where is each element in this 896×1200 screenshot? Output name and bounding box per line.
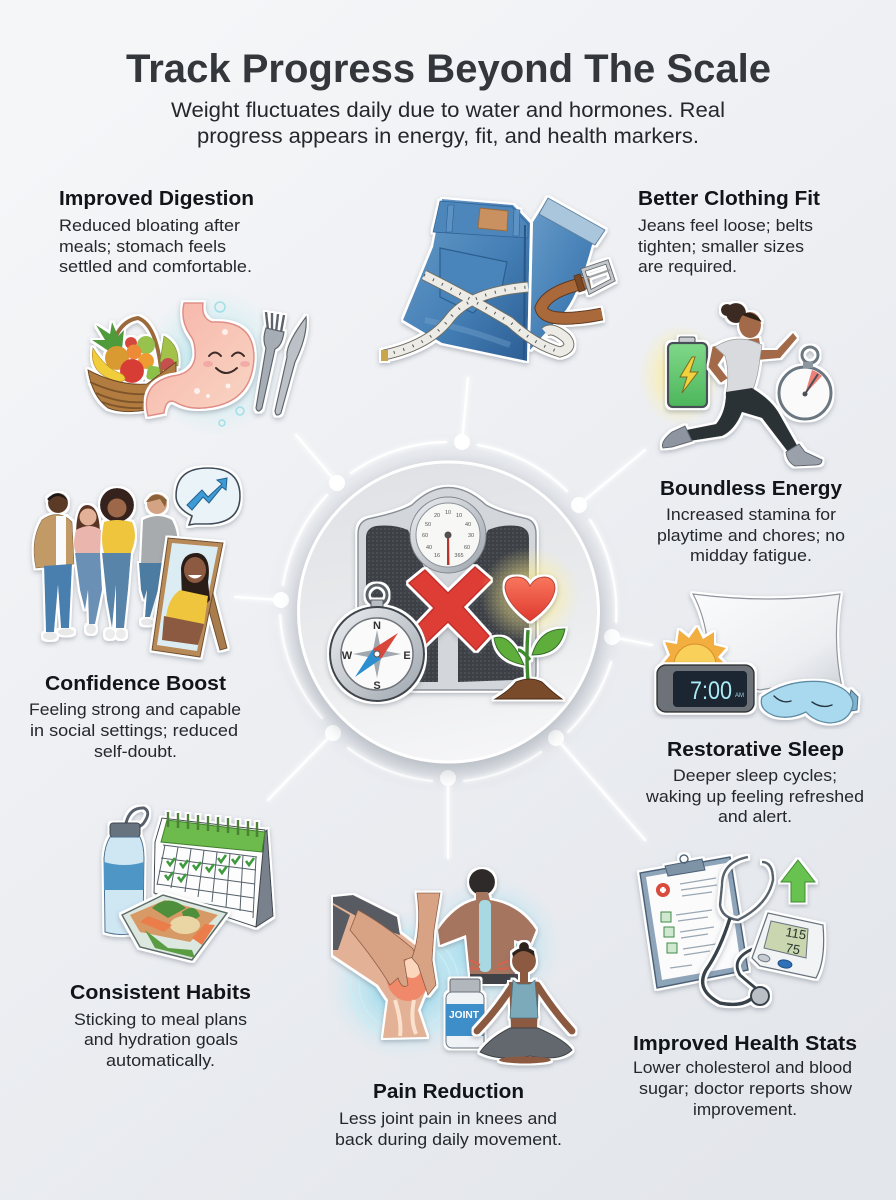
title: Track Progress Beyond The Scale <box>126 47 771 91</box>
text: consistent habits: Consistent Habits <box>70 981 251 1004</box>
text: restorative sleep: Restorative Sleep <box>667 738 844 761</box>
text: improved health stats: Improved Health Stats <box>633 1032 857 1055</box>
icon: back with glowing spine <box>438 869 536 984</box>
scale dial: 40 <box>465 522 471 528</box>
central disc <box>298 462 598 762</box>
scale dial: 50 <box>425 522 431 528</box>
panel: boundless energy <box>638 303 845 565</box>
icon: runner <box>662 303 822 466</box>
friend 4 <box>139 494 177 626</box>
scale dial: 16 <box>434 553 440 559</box>
icon: compass: W <box>342 650 353 662</box>
text: confidence boost <box>29 672 241 761</box>
text: restorative sleep: and alert. <box>718 808 792 826</box>
icon: battery <box>668 337 707 407</box>
text: confidence boost: self-doubt. <box>94 743 177 761</box>
text: confidence boost: in social settings; reduced <box>30 722 238 740</box>
icon: speech bubble with trend arrow <box>176 468 240 525</box>
text: improved health stats: Lower cholesterol and blood <box>633 1059 852 1077</box>
text: improved digestion <box>59 187 254 276</box>
icon: sleep mask <box>761 681 858 723</box>
icon: compass <box>330 585 424 701</box>
heart <box>505 577 555 621</box>
icon: water bottle <box>104 808 148 935</box>
scale dial <box>410 497 486 573</box>
text: consistent habits: Sticking to meal plans <box>74 1011 247 1029</box>
ring nodes <box>273 434 620 786</box>
icon: glowing heart on sprout <box>480 547 580 699</box>
icon: sun <box>662 627 726 665</box>
text: improved health stats: improvement. <box>693 1101 797 1119</box>
icon: blue pain glow <box>325 910 485 1060</box>
icon: alarm clock <box>657 665 754 712</box>
icon: blood pressure monitor: 115 <box>784 924 808 943</box>
text: better clothing fit: are required. <box>638 258 737 276</box>
icon glow <box>638 323 722 427</box>
text: boundless energy: Boundless Energy <box>660 477 843 500</box>
icon: clipboard <box>640 855 748 988</box>
panel: better clothing fit <box>381 187 820 361</box>
icon: smiling stomach <box>146 303 254 416</box>
text: restorative sleep: waking up feeling refreshed <box>645 788 864 806</box>
panel: pain reduction <box>325 869 572 1149</box>
text: pain reduction: back during daily movement. <box>335 1131 562 1149</box>
text: consistent habits: automatically. <box>106 1052 215 1070</box>
icon: stethoscope <box>703 857 773 1005</box>
icon: meditating woman <box>477 942 572 1064</box>
text: pain reduction <box>335 1080 562 1149</box>
icon: alarm clock: AM <box>735 693 744 699</box>
scale dial: 30 <box>468 533 474 539</box>
text: pain reduction: Pain Reduction <box>373 1080 524 1103</box>
text: consistent habits: and hydration goals <box>84 1031 238 1049</box>
icon: blood pressure monitor: 75 <box>784 940 801 957</box>
text: restorative sleep <box>645 738 864 826</box>
scale dial: 10 <box>456 513 462 519</box>
icon: blood pressure monitor <box>752 913 824 978</box>
text: consistent habits <box>70 981 251 1070</box>
icon: stopwatch <box>779 347 831 419</box>
panel: consistent habits <box>70 808 273 1070</box>
icon: fruit basket <box>88 318 178 412</box>
icon: compass: S <box>373 680 381 692</box>
subtitle: progress appears in energy, fit, and health markers. <box>197 125 699 148</box>
text: improved health stats: sugar; doctor reports show <box>639 1080 852 1098</box>
scale dial: 40 <box>426 545 432 551</box>
scale dial: 60 <box>422 533 428 539</box>
text: improved health stats <box>633 1032 857 1119</box>
friend 1 <box>34 493 74 640</box>
scale dial: 10 <box>445 510 451 516</box>
panel: restorative sleep <box>645 594 864 826</box>
text: improved digestion: Improved Digestion <box>59 187 254 210</box>
belt <box>541 282 602 318</box>
scale dial: 60 <box>464 545 470 551</box>
panel: confidence boost <box>29 468 241 761</box>
measuring tape <box>384 275 569 355</box>
text: better clothing fit: Jeans feel loose; belts <box>638 217 813 235</box>
text: boundless energy: playtime and chores; no <box>657 527 845 545</box>
icon: group of friends <box>34 488 177 640</box>
subtitle <box>171 99 725 148</box>
text: pain reduction: Less joint pain in knees and <box>339 1110 557 1128</box>
friend 3 <box>100 488 135 639</box>
icon: green up arrow <box>781 860 815 902</box>
text: restorative sleep: Deeper sleep cycles; <box>673 767 837 785</box>
text: confidence boost: Confidence Boost <box>45 672 226 695</box>
text: better clothing fit: tighten; smaller sizes <box>638 238 804 256</box>
icon: alarm clock: 7:00 <box>690 677 732 705</box>
icon: meal prep container <box>122 895 227 960</box>
icon: knee held by hands <box>333 893 440 1038</box>
icon: jeans with measuring tape and belt <box>381 198 613 361</box>
icon: joint supplement bottle: JOINT <box>449 1010 479 1021</box>
text: improved digestion: settled and comfortable. <box>59 258 252 276</box>
icon: habit calendar <box>154 812 273 927</box>
text: better clothing fit <box>638 187 820 276</box>
friend 2 <box>74 505 102 634</box>
icon: compass: E <box>403 650 411 662</box>
text: improved digestion: Reduced bloating after <box>59 217 241 235</box>
scale dial: 20 <box>434 513 440 519</box>
icon: joint supplement bottle <box>446 979 484 1048</box>
icon: pillow <box>693 594 842 690</box>
central hub diagram <box>235 378 652 858</box>
icon: fork and knife <box>256 312 306 415</box>
icon: mirror with reflection <box>152 538 227 657</box>
icon: compass: N <box>373 620 381 632</box>
text: confidence boost: Feeling strong and capable <box>29 701 241 719</box>
panel: improved digestion <box>59 187 306 436</box>
text: better clothing fit: Better Clothing Fit <box>638 187 820 210</box>
text: boundless energy: midday fatigue. <box>690 547 812 565</box>
icon: bathroom scale <box>358 488 536 690</box>
bubbles <box>215 302 244 426</box>
icon: red cross <box>409 567 490 650</box>
text: boundless energy: Increased stamina for <box>666 506 837 524</box>
ring and spoke connectors <box>235 378 652 858</box>
text: improved digestion: meals; stomach feels <box>59 238 226 256</box>
text: boundless energy <box>657 477 845 565</box>
sprout <box>494 629 565 699</box>
icon: digestion glow <box>143 288 287 436</box>
scale dial: 365 <box>454 553 464 559</box>
subtitle: Weight fluctuates daily due to water and hormones. Real <box>171 99 725 122</box>
panel: improved health stats <box>633 855 857 1119</box>
